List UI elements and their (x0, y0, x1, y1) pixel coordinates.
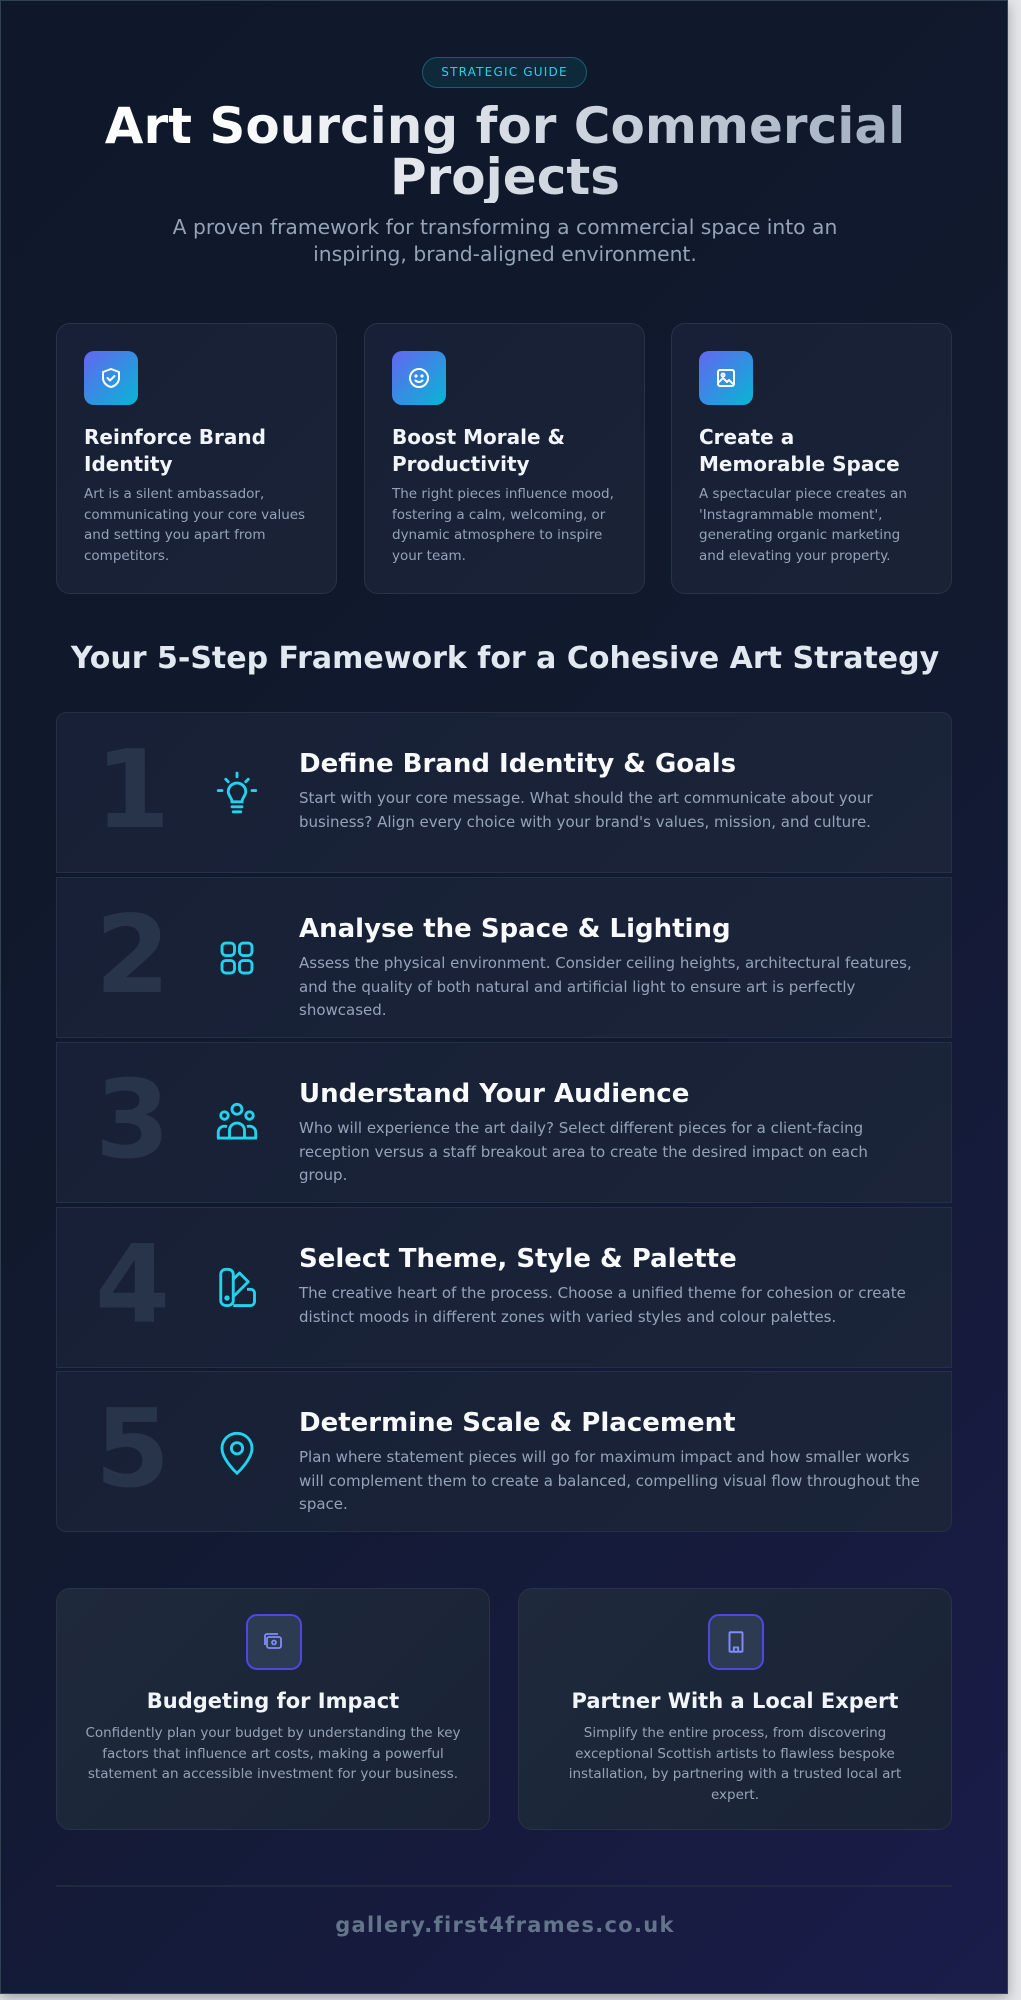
icon: smile (392, 351, 446, 405)
step 1: business? Align every choice with your brand's values, mission, and culture. (299, 812, 871, 830)
icon: people (216, 1102, 258, 1140)
icon: image (699, 351, 753, 405)
step 5: space. (299, 1495, 348, 1513)
step 5: 5 (95, 1387, 170, 1512)
panel: budgeting (56, 1588, 490, 1830)
footer url: gallery.first4frames.co.uk (335, 1913, 675, 1937)
title (1, 101, 1009, 203)
panel: reinforce brand identity (56, 323, 337, 594)
icon: swatches (219, 1268, 256, 1307)
icon: shield (84, 351, 138, 405)
step 4: Select Theme, Style & Palette (299, 1244, 737, 1274)
step 3: Who will experience the art daily? Select different pieces for a client-facing (299, 1119, 863, 1137)
icon: grid (220, 942, 254, 974)
heading: Reinforce Brand Identity (84, 425, 266, 476)
step 1 (56, 712, 952, 873)
step 1: Define Brand Identity & Goals (299, 749, 736, 779)
text: Confidently plan your budget by understanding the key factors that influence art costs, making a powerful statement an accessible investment for your business. (85, 1725, 461, 1782)
badge: strategic guide (422, 57, 587, 88)
step 1: Start with your core message. What should the art communicate about your (299, 789, 873, 807)
step 3: group. (299, 1166, 347, 1184)
icon: map pin (220, 1432, 254, 1476)
step 5: Plan where statement pieces will go for maximum impact and how smaller works (299, 1448, 910, 1466)
step 1: 1 (95, 728, 170, 853)
text: Simplify the entire process, from discovering exceptional Scottish artists to flawless bespoke installation, by partnering with a trusted local art expert. (569, 1725, 901, 1802)
heading (699, 425, 900, 476)
step 4 (56, 1207, 952, 1368)
step 2: Analyse the Space & Lighting (299, 914, 731, 944)
step 3: Understand Your Audience (299, 1079, 689, 1109)
step 2 (56, 877, 952, 1038)
icon: building (708, 1614, 764, 1670)
step 2: 2 (95, 893, 170, 1018)
step 5: Determine Scale & Placement (299, 1408, 736, 1438)
heading: Budgeting for Impact (147, 1689, 399, 1713)
title: Art Sourcing for Commercial (105, 97, 905, 155)
text: Art is a silent ambassador, communicating your core values and setting you apart from competitors. (84, 486, 305, 564)
heading: Partner With a Local Expert (572, 1689, 898, 1713)
step 4: distinct moods in different zones with varied styles and colour palettes. (299, 1308, 836, 1326)
step 3 (56, 1042, 952, 1203)
step 4: 4 (95, 1223, 170, 1348)
panel: boost morale (364, 323, 645, 594)
icon: lightbulb (216, 772, 258, 814)
step 4: The creative heart of the process. Choose a unified theme for cohesion or create (299, 1284, 906, 1302)
heading: Create a (699, 425, 794, 449)
text: The right pieces influence mood, fostering a calm, welcoming, or dynamic atmosphere to inspire your team. (392, 486, 614, 564)
panel: memorable space (671, 323, 952, 594)
step 3: 3 (95, 1058, 170, 1183)
heading: Boost Morale & Productivity (392, 425, 565, 476)
panel: local expert (518, 1588, 952, 1830)
icon: money (246, 1614, 302, 1670)
text: A spectacular piece creates an 'Instagrammable moment', generating organic marketing and elevating your property. (699, 486, 907, 564)
step 5 (56, 1371, 952, 1532)
section heading: Your 5-Step Framework for a Cohesive Art Strategy (71, 641, 939, 676)
step 2: and the quality of both natural and artificial light to ensure art is perfectly (299, 978, 855, 996)
heading: Memorable Space (699, 452, 900, 476)
step 2: Assess the physical environment. Consider ceiling heights, architectural features, (299, 954, 912, 972)
title: Projects (390, 148, 620, 206)
step 2: showcased. (299, 1001, 387, 1019)
badge: strategic guide: STRATEGIC GUIDE (441, 65, 568, 79)
step 5: will complement them to create a balanced, compelling visual flow throughout the (299, 1472, 920, 1490)
step 3: reception versus a staff breakout area to create the desired impact on each (299, 1142, 868, 1160)
subtitle: A proven framework for transforming a commercial space into an inspiring, brand-aligned environment. (173, 215, 837, 266)
